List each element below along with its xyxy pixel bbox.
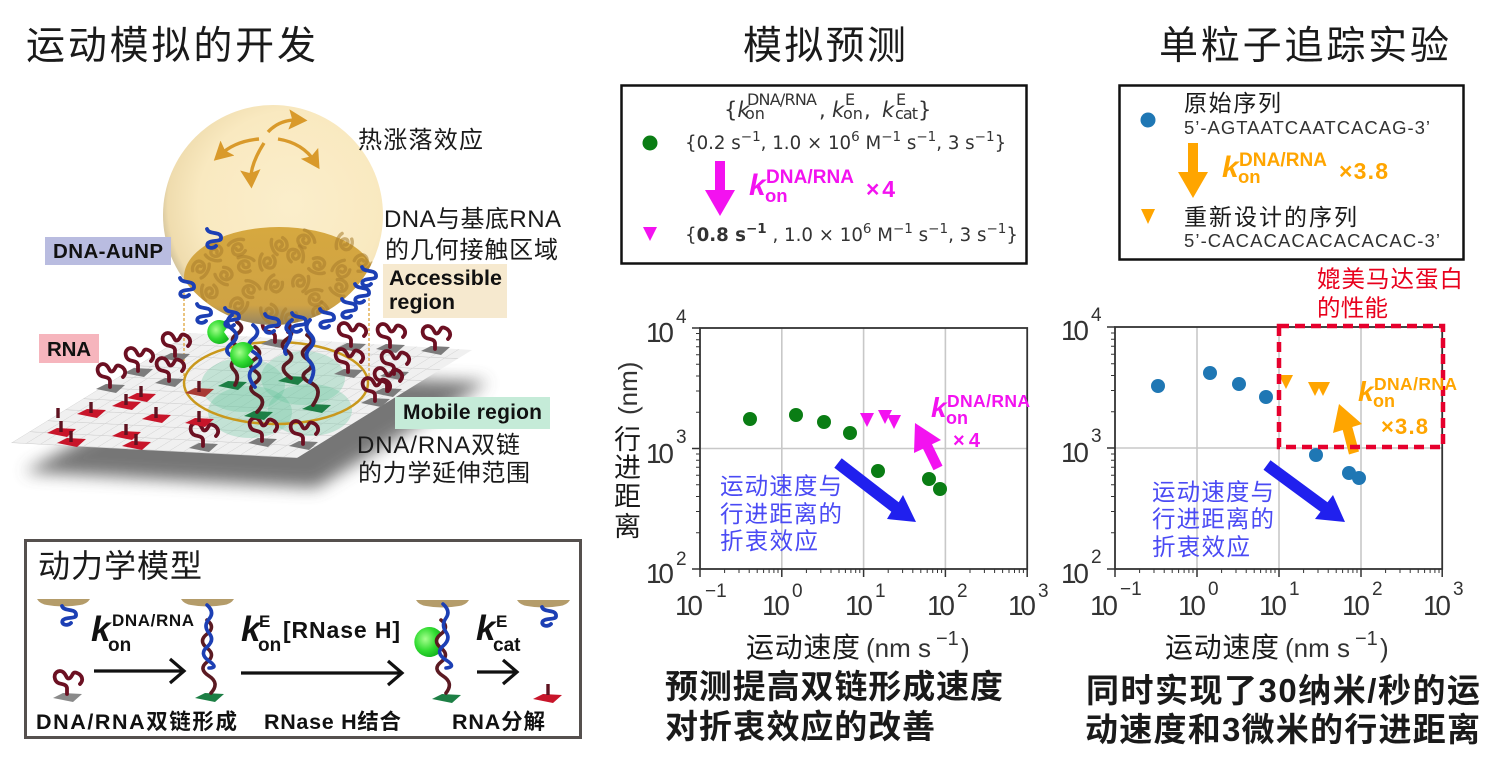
rate constant: k on DNA/RNA bbox=[91, 610, 194, 656]
original parameters: , 1.0 × 10 bbox=[761, 133, 851, 154]
trade-off text: 折衷效应 bbox=[720, 528, 818, 554]
step 3 molecule: duplex with enzyme bbox=[414, 600, 469, 703]
text: DNA/RNA geometric contact area bbox=[384, 206, 561, 264]
improved marker bbox=[643, 227, 657, 241]
legend frame bbox=[1120, 86, 1464, 260]
red callout: motor protein performance bbox=[1317, 266, 1463, 321]
rate change label bbox=[749, 167, 895, 206]
panel: DNA-AuNP motion schematic bbox=[11, 105, 561, 488]
chart: simulation speed vs run length bbox=[613, 307, 1049, 663]
arrow: RNase H binding bbox=[241, 661, 402, 685]
conclusion: simulation bbox=[665, 668, 1003, 745]
rate constant: k on E RNase H: k bbox=[241, 610, 262, 649]
magenta data points bbox=[860, 410, 901, 429]
x axis label: −1 bbox=[1355, 628, 1378, 650]
rate change label: ×3.8 bbox=[1339, 158, 1388, 184]
original parameters: } bbox=[995, 133, 1006, 154]
improved parameters: , 1.0 × 10 bbox=[767, 225, 863, 246]
label: Accessible region: region bbox=[389, 290, 455, 314]
y tick labels: 10 bbox=[646, 317, 674, 348]
x tick labels: 10 bbox=[927, 590, 955, 621]
plot grid bbox=[1115, 327, 1442, 569]
y tick labels: 4 bbox=[1091, 305, 1102, 326]
x tick labels: 3 bbox=[1453, 579, 1464, 600]
title: single particle tracking experiment: 单粒子追踪实验 bbox=[1159, 25, 1449, 68]
conclusion: simulation: 预测提高双链形成速度 bbox=[665, 668, 1003, 705]
conclusion: experiment: 动速度和3微米的行进距离 bbox=[1085, 711, 1480, 748]
title: simulation prediction: 模拟预测 bbox=[743, 25, 906, 68]
rate label: ×4 bbox=[953, 430, 981, 452]
improved parameters: −1 bbox=[746, 221, 767, 237]
trade-off text bbox=[1152, 479, 1274, 560]
rate change label: on bbox=[765, 185, 788, 206]
step 2 molecule: duplex bbox=[181, 599, 234, 702]
improved parameters: −1 bbox=[986, 221, 1006, 237]
step 4 molecule: released DNA and cleaved RNA bbox=[517, 600, 570, 703]
x axis label: (nm s bbox=[866, 633, 931, 663]
chart: experiment speed vs run length bbox=[1061, 305, 1464, 663]
x tick labels: 10 bbox=[1090, 590, 1118, 621]
rate change label bbox=[1222, 150, 1388, 187]
x tick labels: 10 bbox=[1008, 590, 1036, 621]
redesigned sequence: 5’-CACACACACACACAC-3’ bbox=[1184, 230, 1440, 251]
conclusion: experiment: 同时实现了30纳米/秒的运 bbox=[1086, 672, 1480, 709]
text: mechanical extension range of duplex: 的力学延伸范围 bbox=[358, 460, 530, 487]
green data points bbox=[743, 408, 947, 496]
label: Mobile region: Mobile region bbox=[403, 401, 542, 424]
parameter header: on bbox=[843, 104, 863, 123]
mobile region circles bbox=[201, 351, 352, 438]
redesigned sequence label: 重新设计的序列 bbox=[1184, 204, 1357, 230]
text: DNA/RNA geometric contact area: DNA与基底RNA bbox=[384, 206, 561, 233]
rate constant: k on DNA/RNA: k bbox=[91, 610, 112, 649]
improved parameters: −1 bbox=[893, 221, 913, 237]
y tick labels: 10 bbox=[1061, 558, 1089, 589]
parameter header: k bbox=[882, 98, 895, 122]
original sequence: 5’-AGTAATCAATCACAG-3’ bbox=[1184, 117, 1430, 138]
original parameters: −1 bbox=[741, 129, 761, 145]
x tick labels: 2 bbox=[1372, 579, 1383, 600]
x tick labels: 0 bbox=[1208, 579, 1219, 600]
label: Accessible region bbox=[383, 264, 507, 318]
cleaved RNA with red pads bbox=[47, 381, 214, 450]
panel: kinetic model bbox=[26, 540, 580, 738]
parameter header: k bbox=[832, 98, 845, 122]
red callout: motor protein performance: 媲美马达蛋白 bbox=[1317, 266, 1463, 292]
axis ticks bbox=[1107, 327, 1442, 577]
improved parameters: {0.8 s bbox=[685, 225, 746, 246]
step labels: RNase H结合 bbox=[264, 710, 401, 734]
rate label: on bbox=[1373, 391, 1395, 411]
x axis label: 运动速度 bbox=[746, 632, 860, 663]
rate constant: k cat E: cat bbox=[493, 635, 521, 656]
original parameters: −1 bbox=[975, 129, 995, 145]
x tick labels: 10 bbox=[762, 590, 790, 621]
rate change label: DNA/RNA bbox=[1239, 150, 1327, 171]
arrow: magenta improvement bbox=[914, 423, 942, 470]
rate label: k bbox=[931, 392, 948, 423]
heading: kinetic model: 动力学模型 bbox=[38, 548, 202, 584]
x axis label: ) bbox=[1380, 633, 1389, 663]
y axis label: 行 bbox=[614, 425, 641, 455]
DNA/RNA duplex strands bbox=[180, 229, 376, 412]
original parameters: {0.2 s bbox=[685, 133, 741, 154]
parameter header: } bbox=[918, 98, 931, 122]
improved parameters: } bbox=[1006, 225, 1018, 246]
rate change label: ×4 bbox=[866, 176, 895, 202]
x tick labels: −1 bbox=[705, 581, 727, 602]
y tick labels: 3 bbox=[1091, 426, 1102, 447]
text: DNA/RNA geometric contact area: 的几何接触区域 bbox=[385, 237, 558, 264]
x tick labels: 2 bbox=[957, 581, 968, 602]
improved parameters: M bbox=[872, 225, 893, 246]
trade-off text: 运动速度与 bbox=[1152, 479, 1274, 505]
plot frame bbox=[700, 328, 1027, 569]
rate label: on bbox=[946, 408, 968, 428]
rate change label: k bbox=[1222, 151, 1240, 184]
gold nanoparticle sphere bbox=[163, 105, 383, 325]
rate constant: k on E RNase H: [RNase H] bbox=[283, 617, 400, 643]
x tick labels: 1 bbox=[875, 581, 886, 602]
panel: experiment legend bbox=[1120, 86, 1464, 260]
arrow: trade-off bbox=[1264, 460, 1345, 522]
conclusion: experiment bbox=[1085, 672, 1480, 748]
original sequence marker bbox=[1140, 112, 1156, 128]
enzyme RNase H bbox=[207, 320, 229, 344]
blue data points bbox=[1151, 366, 1366, 485]
rate constant: k cat E: E bbox=[496, 612, 507, 631]
improved parameters: 6 bbox=[863, 221, 872, 237]
label: Accessible region: Accessible bbox=[389, 266, 502, 290]
x tick labels: 10 bbox=[675, 590, 703, 621]
y axis label: 距 bbox=[614, 482, 641, 512]
improved parameters: −1 bbox=[928, 221, 948, 237]
label: RNA: RNA bbox=[47, 338, 91, 361]
geometric contact cap bbox=[184, 227, 374, 327]
x tick labels bbox=[675, 581, 1049, 621]
thermal fluctuation arrows bbox=[220, 120, 315, 180]
step labels: RNA分解 bbox=[452, 710, 545, 734]
legend frame bbox=[622, 86, 1026, 264]
arrow: trade-off bbox=[834, 458, 916, 522]
rate constant: k on E RNase H: E bbox=[259, 612, 270, 631]
improved parameters: , 3 s bbox=[948, 225, 986, 246]
plot grid bbox=[700, 328, 1027, 569]
red callout: motor protein performance: 的性能 bbox=[1317, 295, 1388, 321]
text: mechanical extension range of duplex: DNA/RNA双链 bbox=[357, 432, 520, 459]
x tick labels: 3 bbox=[1038, 581, 1049, 602]
rate constant: k on DNA/RNA: DNA/RNA bbox=[112, 611, 194, 630]
parameter header: {k bbox=[724, 98, 750, 122]
rate label bbox=[931, 391, 1030, 452]
y tick labels: 10 bbox=[646, 558, 674, 589]
text: mechanical extension range of duplex bbox=[357, 432, 530, 487]
accessible region dashed guides bbox=[184, 293, 369, 383]
y tick labels: 2 bbox=[1091, 547, 1102, 568]
parameter header: , bbox=[864, 98, 871, 122]
rate constant: k on DNA/RNA: on bbox=[108, 635, 131, 656]
x axis label: 运动速度 bbox=[1165, 632, 1279, 663]
original parameters: , 3 s bbox=[936, 133, 975, 154]
original parameters: 6 bbox=[851, 129, 860, 145]
conclusion: simulation: 对折衷效应的改善 bbox=[665, 708, 935, 745]
rate label: ×3.8 bbox=[1381, 414, 1428, 439]
x tick labels: −1 bbox=[1120, 579, 1142, 600]
x tick labels: 10 bbox=[1178, 590, 1206, 621]
substrate shadow bbox=[24, 372, 488, 488]
y tick labels bbox=[1061, 305, 1102, 589]
rate label: k bbox=[1358, 376, 1375, 407]
redesigned sequence marker bbox=[1141, 209, 1155, 224]
trade-off text: 行进距离的 bbox=[720, 501, 842, 527]
trade-off text: 折衷效应 bbox=[1152, 534, 1250, 560]
y axis label bbox=[613, 362, 643, 542]
y tick labels: 4 bbox=[676, 307, 687, 328]
y tick labels: 10 bbox=[646, 438, 674, 469]
rate label: DNA/RNA bbox=[1374, 374, 1457, 394]
arrow: RNA cleavage bbox=[477, 660, 517, 684]
plot frame bbox=[1115, 327, 1442, 569]
parameter header: on bbox=[745, 104, 765, 123]
text: thermal fluctuation: 热涨落效应 bbox=[358, 127, 483, 154]
rate constant: k cat E bbox=[476, 609, 521, 656]
label: Mobile region bbox=[395, 397, 550, 429]
motor protein performance region bbox=[1279, 326, 1443, 447]
y tick labels: 10 bbox=[1061, 437, 1089, 468]
parameter header: E bbox=[896, 90, 906, 109]
rate change label: on bbox=[1238, 166, 1261, 187]
enzyme RNase H bound bbox=[230, 342, 254, 368]
step 1 molecule: free DNA and RNA bbox=[37, 599, 90, 702]
kinetic model frame bbox=[26, 540, 580, 738]
y tick labels bbox=[646, 307, 687, 589]
x tick labels: 0 bbox=[792, 581, 803, 602]
original parameters: −1 bbox=[916, 129, 936, 145]
rate label bbox=[1358, 374, 1457, 439]
axis ticks bbox=[692, 328, 1027, 577]
parameter header bbox=[724, 90, 931, 123]
arrow: orange improvement bbox=[1333, 404, 1362, 454]
label: RNA bbox=[39, 334, 99, 363]
y tick labels: 2 bbox=[676, 549, 687, 570]
rate change label: DNA/RNA bbox=[766, 167, 854, 188]
x axis label: (nm s bbox=[1285, 633, 1350, 663]
trade-off text: 行进距离的 bbox=[1152, 506, 1274, 532]
title: motion simulation development: 运动模拟的开发 bbox=[26, 25, 316, 68]
parameter header: , bbox=[819, 98, 826, 122]
original marker bbox=[642, 136, 658, 150]
parameter header: DNA/RNA bbox=[747, 90, 817, 109]
x axis label: ) bbox=[961, 633, 970, 663]
rate constant: k on E RNase H: on bbox=[258, 635, 281, 656]
y axis label: 进 bbox=[614, 453, 641, 483]
parameter header: cat bbox=[895, 104, 918, 123]
y axis label: 离 bbox=[614, 512, 641, 542]
parameter header: E bbox=[845, 90, 855, 109]
original parameters: s bbox=[901, 133, 916, 154]
x tick labels: 10 bbox=[1342, 590, 1370, 621]
arrow: duplex formation bbox=[94, 659, 184, 683]
original parameters: M bbox=[860, 133, 881, 154]
mobile region outline bbox=[184, 342, 368, 424]
label: DNA-AuNP: DNA-AuNP bbox=[53, 240, 163, 263]
x axis label bbox=[746, 628, 970, 663]
RNA-coated substrate floor bbox=[11, 333, 472, 458]
trade-off text: 运动速度与 bbox=[720, 473, 842, 499]
x tick labels: 1 bbox=[1289, 579, 1300, 600]
y tick labels: 3 bbox=[676, 427, 687, 448]
x tick labels: 10 bbox=[845, 590, 873, 621]
trade-off text bbox=[720, 473, 842, 554]
arrow: orange down bbox=[1178, 143, 1208, 198]
DNA curls on the particle bbox=[180, 229, 376, 333]
rate constant: k cat E: k bbox=[476, 609, 497, 648]
rate change label: k bbox=[749, 169, 767, 202]
intact RNA with gray pads bbox=[96, 319, 450, 452]
x tick labels: 10 bbox=[1423, 590, 1451, 621]
original sequence label: 原始序列 bbox=[1184, 90, 1281, 116]
x tick labels bbox=[1090, 579, 1464, 621]
original parameters: −1 bbox=[881, 129, 901, 145]
y axis label: (nm) bbox=[613, 362, 643, 415]
rate constant: k on E RNase H bbox=[241, 610, 400, 656]
rate label: DNA/RNA bbox=[947, 391, 1030, 411]
improved parameters: s bbox=[913, 225, 928, 246]
duplex pads in green bbox=[218, 376, 331, 420]
arrow: magenta down bbox=[705, 161, 735, 216]
step labels bbox=[36, 710, 545, 734]
step labels: DNA/RNA双链形成 bbox=[36, 710, 237, 734]
y tick labels: 10 bbox=[1061, 315, 1089, 346]
x axis label bbox=[1165, 628, 1389, 663]
panel: simulation legend bbox=[622, 86, 1026, 264]
x axis label: −1 bbox=[936, 628, 959, 650]
x tick labels: 10 bbox=[1259, 590, 1287, 621]
orange data points bbox=[1279, 375, 1330, 396]
